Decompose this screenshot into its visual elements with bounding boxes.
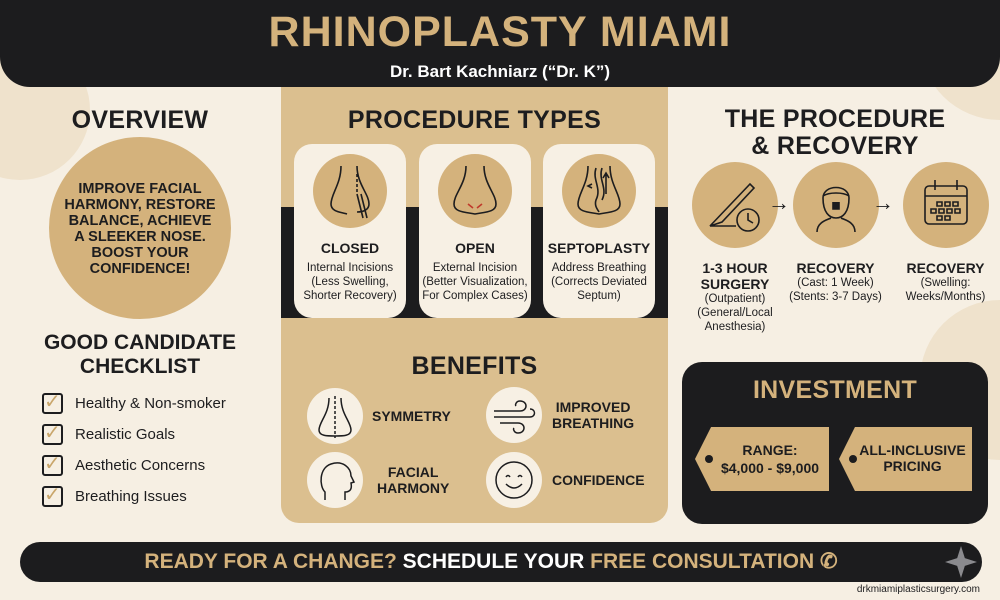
card: open: (Better Visualization, — [422, 276, 528, 288]
card: septoplasty: Address Breathing — [552, 262, 646, 274]
benefit: breathing: BREATHING — [552, 415, 634, 431]
arrow: → — [872, 190, 894, 215]
step: surgery: Anesthesia) — [705, 321, 765, 333]
subtitle: Dr. Bart Kachniarz (“Dr. K”) — [390, 62, 610, 81]
overview circle: IMPROVE FACIAL — [78, 181, 202, 197]
card: closed: Internal Incisions — [307, 262, 393, 274]
checklist: Healthy & Non-smoker — [75, 395, 226, 412]
step: surgery: SURGERY — [701, 276, 769, 292]
card: septoplasty: SEPTOPLASTY — [548, 240, 650, 256]
step: surgery — [692, 162, 778, 333]
overview circle: BALANCE, ACHIEVE — [69, 213, 211, 229]
card: closed: (Less Swelling, — [311, 276, 389, 288]
step: recovery swelling: (Swelling: — [921, 277, 970, 289]
checklist: Realistic Goals — [75, 426, 175, 443]
benefit: confidence — [486, 452, 645, 508]
cta bar: READY FOR A CHANGE? SCHEDULE YOUR FREE CONSULTATION ✆ — [144, 550, 838, 573]
step: recovery cast: (Stents: 3-7 Days) — [789, 291, 882, 303]
step: recovery swelling: RECOVERY — [906, 260, 985, 276]
card: open — [419, 144, 531, 318]
website: drkmiamiplasticsurgery.com — [857, 584, 980, 595]
overview circle: BOOST YOUR — [91, 245, 189, 261]
icon: sparkle — [945, 546, 977, 578]
overview heading: OVERVIEW — [72, 106, 208, 134]
investment heading: INVESTMENT — [753, 376, 917, 404]
checklist: ✓ — [44, 391, 61, 413]
card: septoplasty: Septum) — [577, 290, 621, 302]
benefit: symmetry — [307, 388, 451, 444]
card: closed: Shorter Recovery) — [303, 290, 397, 302]
procedure & recovery heading: & RECOVERY — [751, 132, 919, 160]
step: surgery: (Outpatient) — [705, 293, 765, 305]
benefit: symmetry: SYMMETRY — [372, 408, 451, 424]
card: open: External Incision — [433, 262, 517, 274]
step: recovery swelling — [903, 162, 989, 303]
step: recovery swelling: Weeks/Months) — [906, 291, 985, 303]
card: closed — [294, 144, 406, 318]
checklist: Aesthetic Concerns — [75, 457, 205, 474]
step: recovery cast: (Cast: 1 Week) — [797, 277, 874, 289]
card: septoplasty — [543, 144, 655, 318]
step: recovery cast: RECOVERY — [796, 260, 875, 276]
overview circle: CONFIDENCE! — [90, 261, 190, 277]
tag: range — [695, 427, 829, 491]
checklist: Breathing Issues — [75, 488, 187, 505]
checklist: ✓ — [44, 453, 61, 475]
card: septoplasty: (Corrects Deviated — [551, 276, 647, 288]
overview circle — [49, 137, 231, 319]
title: RHINOPLASTY MIAMI — [269, 8, 731, 56]
benefit: facial harmony — [307, 452, 449, 508]
benefits heading: BENEFITS — [411, 352, 538, 380]
checklist: ✓ — [44, 422, 61, 444]
checklist: ✓ — [44, 484, 61, 506]
benefit: breathing: IMPROVED — [556, 399, 630, 415]
header — [0, 0, 1000, 87]
step: surgery: (General/Local — [697, 307, 773, 319]
card: open: For Complex Cases) — [422, 290, 528, 302]
benefit: facial harmony: FACIAL — [388, 464, 438, 480]
card: open: OPEN — [455, 240, 495, 256]
overview circle: HARMONY, RESTORE — [64, 197, 216, 213]
cta bar — [20, 542, 982, 582]
tag: all-inclusive: PRICING — [883, 458, 942, 474]
arrow: → — [768, 190, 790, 215]
card: closed: CLOSED — [321, 240, 379, 256]
step: recovery cast — [789, 162, 882, 303]
checklist heading: CHECKLIST — [80, 355, 200, 378]
procedure & recovery heading — [725, 105, 945, 160]
panel: middle — [281, 87, 668, 523]
benefit: breathing — [486, 387, 634, 443]
tag: all-inclusive: ALL-INCLUSIVE — [859, 442, 966, 458]
benefit: facial harmony: HARMONY — [377, 480, 449, 496]
procedure types heading: PROCEDURE TYPES — [348, 106, 601, 134]
step: surgery: 1-3 HOUR — [702, 260, 768, 276]
tag: range: $4,000 - $9,000 — [721, 460, 819, 476]
benefit: confidence: CONFIDENCE — [552, 472, 645, 488]
checklist heading: GOOD CANDIDATE — [44, 331, 236, 354]
panel: investment — [682, 362, 988, 524]
procedure & recovery heading: THE PROCEDURE — [725, 105, 945, 133]
tag: range: RANGE: — [742, 442, 798, 458]
tag: all-inclusive — [839, 427, 972, 491]
overview circle: A SLEEKER NOSE. — [74, 229, 206, 245]
checklist heading — [44, 331, 236, 378]
checklist — [42, 391, 226, 507]
